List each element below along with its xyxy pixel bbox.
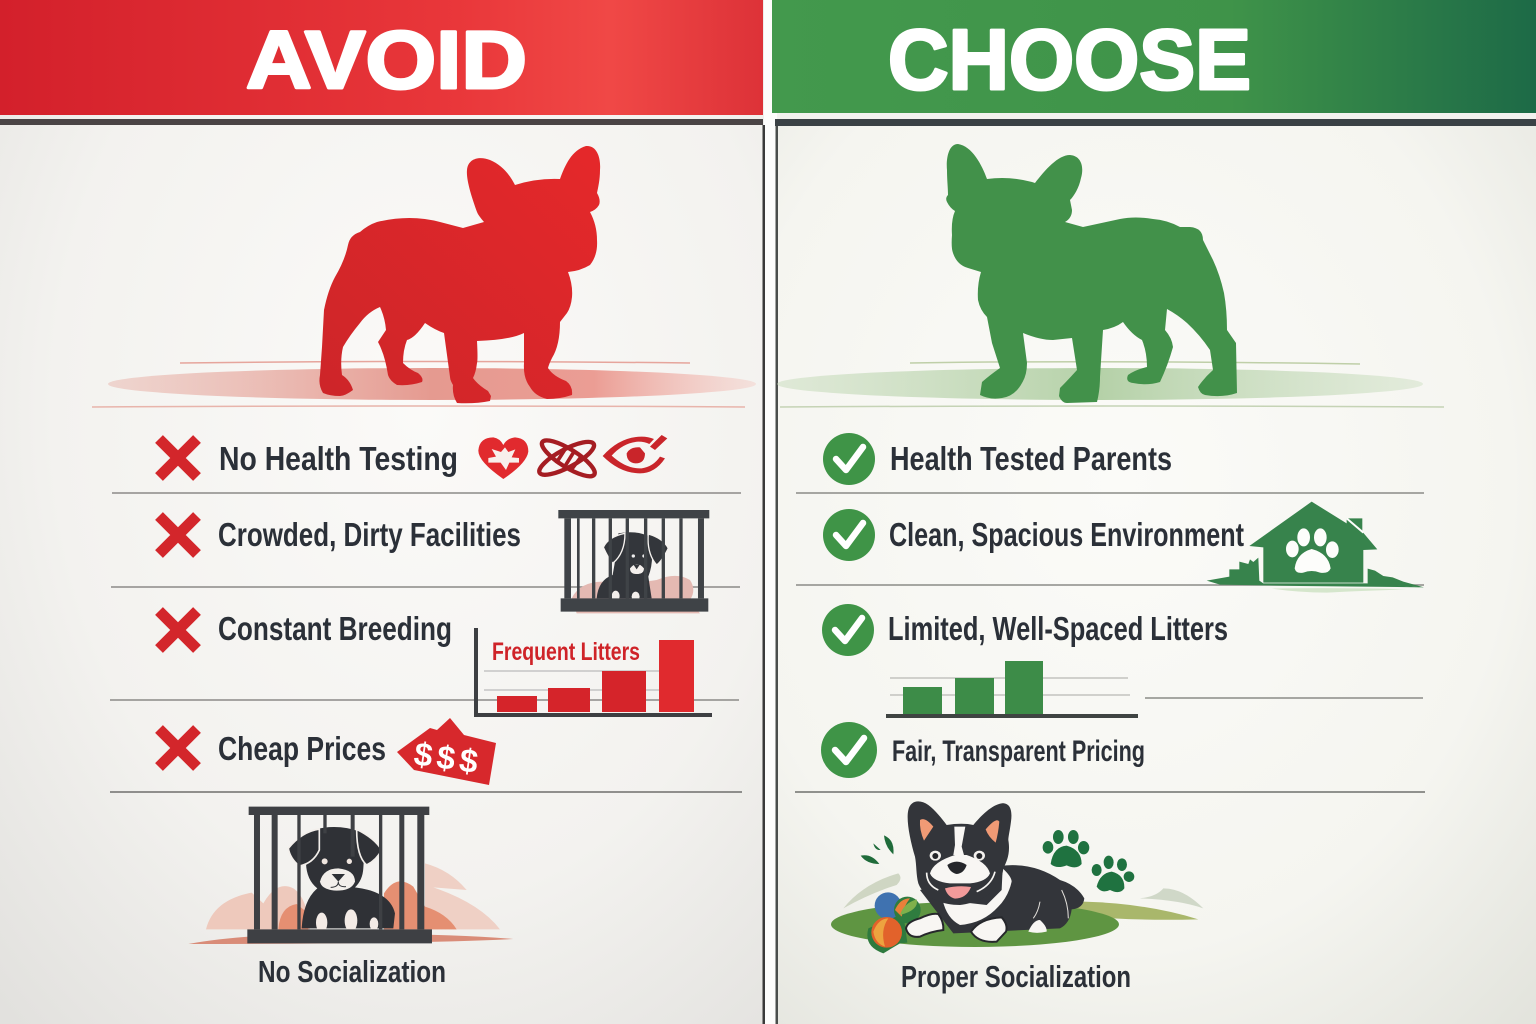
- check icon: [823, 509, 875, 561]
- check icon: [822, 604, 874, 656]
- caption: proper socialization: Proper Socialization: [901, 959, 1131, 994]
- row: no health testing: [159, 434, 667, 482]
- body: [920, 865, 1084, 933]
- row: fair pricing: Fair, Transparent Pricing: [892, 735, 1145, 768]
- header banner: avoid: AVOID: [246, 15, 527, 106]
- x mark: [159, 516, 197, 554]
- row: no health testing: No Health Testing: [219, 440, 458, 477]
- divider: [110, 699, 739, 701]
- divider: [796, 492, 1424, 494]
- row: constant breeding: [159, 610, 452, 649]
- divider: [111, 586, 740, 588]
- ground shadow: avoid: [92, 362, 756, 407]
- bar chart: frequent litters: [476, 628, 712, 715]
- icon: heart: [478, 437, 528, 479]
- row: health tested parents: [823, 433, 1172, 485]
- icon: small cage with puppy: [558, 510, 709, 613]
- divider: [110, 791, 742, 793]
- bar chart: frequent litters: Frequent Litters: [492, 638, 640, 666]
- header banner: choose: CHOOSE: [888, 13, 1251, 108]
- header banner: choose: [772, 0, 1536, 126]
- bar chart: well-spaced litters: [886, 661, 1138, 718]
- row: cheap prices: Cheap Prices: [218, 730, 386, 767]
- row: fair pricing: [821, 722, 1145, 778]
- panel divider: [762, 0, 778, 1024]
- panel: choose: [772, 0, 1536, 1024]
- ears and head: [908, 801, 1011, 905]
- row: constant breeding: Constant Breeding: [218, 610, 452, 647]
- row: crowded facilities: Crowded, Dirty Facilities: [218, 516, 521, 553]
- divider: [795, 791, 1425, 793]
- illustration: caged puppy: [188, 807, 513, 944]
- row: limited litters: [822, 604, 1228, 656]
- row: clean environment: Clean, Spacious Environment: [889, 516, 1244, 553]
- paws: [906, 914, 943, 937]
- caption: no socialization: No Socialization: [258, 954, 446, 989]
- red dog silhouette: [319, 146, 600, 403]
- x mark: [159, 611, 197, 649]
- ground shadow: choose: [777, 362, 1444, 407]
- check icon: [823, 433, 875, 485]
- check icon: [821, 722, 877, 778]
- icon: price tag: $$$: [412, 735, 480, 780]
- illustration: happy puppy: [831, 801, 1203, 953]
- row: clean environment: [823, 509, 1244, 561]
- row: cheap prices: [159, 729, 386, 767]
- green paws: [1043, 830, 1134, 892]
- row: crowded facilities: [159, 516, 521, 554]
- x mark: [159, 729, 197, 767]
- row: limited litters: Limited, Well-Spaced Litters: [888, 610, 1228, 647]
- divider: [1145, 697, 1423, 699]
- green dog silhouette: [946, 144, 1237, 403]
- x mark: [159, 439, 197, 477]
- icon: house with paw: [1207, 502, 1424, 593]
- panel: avoid: [0, 0, 764, 1024]
- icon: dna: [535, 434, 599, 482]
- divider: [112, 492, 741, 494]
- row: health tested parents: Health Tested Parents: [890, 440, 1172, 477]
- icon: price tag: [397, 718, 496, 785]
- header banner: avoid: [0, 0, 763, 125]
- icon: eye: [603, 435, 667, 473]
- divider: [796, 584, 1424, 586]
